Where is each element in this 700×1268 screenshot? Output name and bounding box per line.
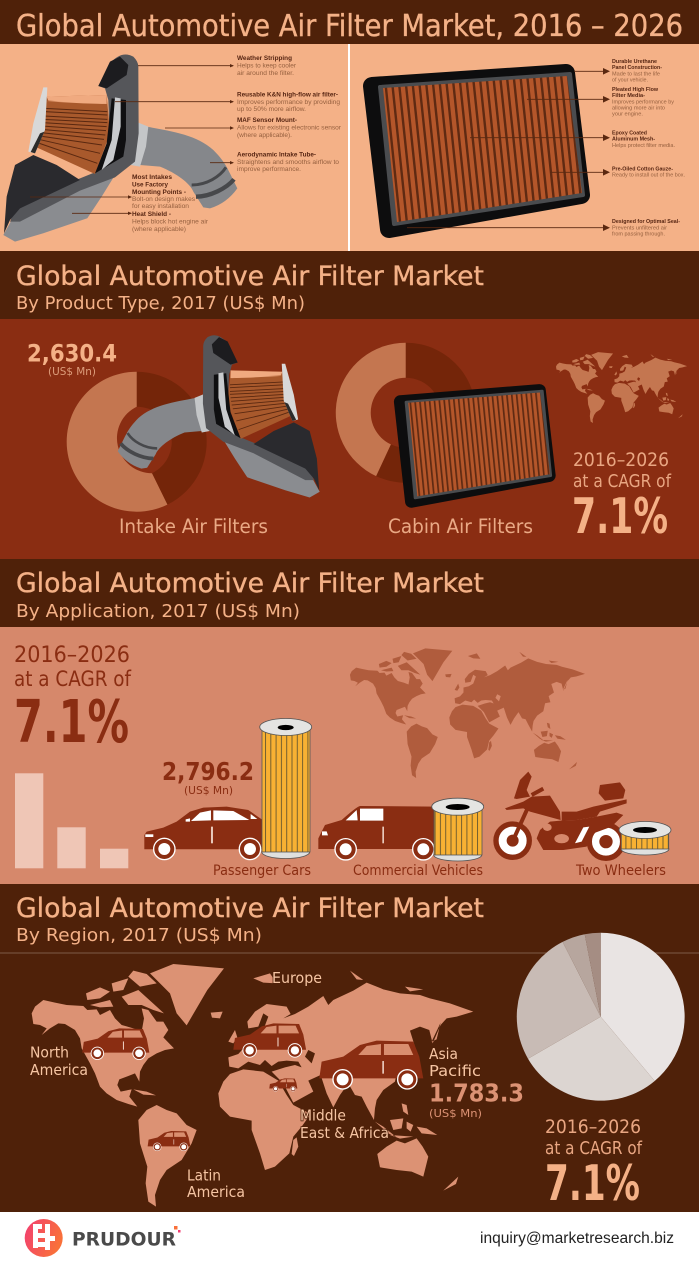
callout: optimal seal: Prevents unfiltered air	[612, 226, 667, 232]
callout: cotton gauze: Ready to install out of the box.	[612, 172, 685, 178]
CAGR callout	[14, 643, 132, 756]
callout: filter media: Improves performance by	[612, 100, 674, 106]
panel: region	[0, 933, 699, 1212]
CAGR callout: 2016–2026	[545, 1117, 641, 1138]
callout: filter media: Pleated High Flow	[612, 87, 659, 93]
callout: heat shield: (where applicable)	[132, 226, 186, 233]
icon: vehicle latin america	[148, 1131, 190, 1151]
logo wordmark: PRUDOUR	[72, 1230, 176, 1251]
callout: weather stripping: air around the filter.	[237, 70, 294, 77]
label: asia pacific: Pacific	[429, 1062, 481, 1080]
callout: heat shield: Heat Shield -	[132, 211, 171, 218]
label: north america: North	[30, 1044, 69, 1062]
callout: reusable filter: Reusable K&N high-flow air filter-	[237, 92, 338, 98]
icon: medium oil filter	[432, 798, 484, 861]
callout: urethane construction: Durable Urethane	[612, 59, 657, 65]
callout: cotton gauze: Pre-Oiled Cotton Gauze-	[612, 166, 673, 172]
icon: vehicle north america	[82, 1028, 149, 1060]
CAGR callout: 2016–2026	[573, 450, 669, 471]
callout: reusable filter: Improves performance by providing	[237, 99, 340, 106]
bar chart	[15, 773, 128, 868]
icon: vehicle asia pacific	[319, 1041, 423, 1089]
callout: optimal seal	[612, 219, 680, 238]
callout: aluminum mesh: Helps protect filter media.	[612, 143, 675, 149]
callout: MAF sensor	[237, 117, 342, 139]
heading: Global Automotive Air Filter Market	[16, 568, 484, 599]
value: passenger cars: 2,796.2	[162, 757, 254, 786]
panel: product type	[0, 319, 699, 559]
illustration: intake air filter	[3, 54, 237, 242]
callout: cotton gauze	[612, 166, 685, 178]
world map	[556, 352, 687, 423]
label: passenger cars: Passenger Cars	[213, 863, 311, 879]
label: asia pacific	[429, 1045, 481, 1080]
CAGR callout: 2016–2026	[14, 643, 130, 668]
title band	[0, 0, 699, 44]
label: middle east and africa: East & Africa	[300, 1124, 389, 1142]
callout: filter media	[612, 87, 674, 118]
heading: Global Automotive Air Filter Market	[16, 893, 484, 924]
subheading: By Product Type, 2017 (US$ Mn)	[16, 293, 305, 314]
callout: MAF sensor: MAF Sensor Mount-	[237, 117, 297, 124]
icon: small oil filter	[619, 822, 671, 855]
icon: tall oil filter	[260, 718, 312, 858]
callout: aluminum mesh: Aluminum Mesh-	[612, 136, 655, 142]
footer	[25, 1219, 674, 1257]
callout arrowheads	[128, 64, 234, 215]
icon: van	[318, 806, 436, 860]
label: latin america: Latin	[187, 1167, 221, 1185]
callout: optimal seal: from passing through.	[612, 232, 665, 238]
callout: urethane construction	[612, 59, 662, 84]
callout leader lines	[407, 71, 606, 228]
callout: urethane construction: Made to last the life	[612, 72, 660, 78]
callout: intake tube	[237, 152, 339, 173]
world map	[350, 648, 585, 778]
icon: vehicle europe	[233, 1023, 306, 1057]
icon: vehicle middle east	[269, 1078, 297, 1091]
callout: mounting points: Most Intakes	[132, 174, 172, 181]
panel: panel filter anatomy	[350, 44, 699, 251]
callout: MAF sensor: Allows for existing electronic sensor	[237, 124, 342, 132]
panel: intake filter anatomy	[0, 44, 348, 251]
label: latin america: America	[187, 1183, 245, 1201]
label: asia pacific: Asia	[429, 1045, 458, 1063]
logo dots	[174, 1226, 180, 1232]
label: cabin air filters: Cabin Air Filters	[388, 515, 533, 538]
callout: heat shield: Helps block hot engine air	[132, 218, 209, 226]
callout: mounting points	[132, 174, 195, 210]
CAGR callout: at a CAGR of	[14, 667, 132, 691]
callout: heat shield	[132, 211, 209, 233]
panel: application	[0, 627, 699, 884]
heading: Global Automotive Air Filter Market	[16, 261, 484, 292]
label: intake air filters: Intake Air Filters	[119, 515, 268, 538]
callout: mounting points: for easy installation	[132, 203, 189, 210]
illustration: cabin air filter	[399, 390, 552, 502]
band: application heading	[0, 559, 699, 627]
callout arrowheads	[603, 68, 610, 231]
donut chart: cabin air filters	[336, 343, 476, 483]
callout: weather stripping: Helps to keep cooler	[237, 62, 297, 70]
callout: mounting points: Bolt-on design makes	[132, 196, 195, 203]
CAGR callout	[572, 450, 672, 545]
callout: intake tube: improve performance.	[237, 166, 301, 173]
label: north america: America	[30, 1061, 88, 1079]
band: region heading	[0, 884, 699, 952]
callout: filter media: your engine.	[612, 112, 643, 118]
callout: weather stripping: Weather Stripping	[237, 55, 292, 62]
callout: filter media: allowing more air into	[612, 106, 665, 112]
label: two wheelers: Two Wheelers	[575, 863, 666, 879]
label: latin america	[187, 1167, 245, 1201]
callout: mounting points: Use Factory	[132, 182, 168, 188]
value: intake: 2,630.4	[27, 340, 117, 368]
CAGR callout: at a CAGR of	[545, 1138, 643, 1159]
callout: aluminum mesh: Epoxy Coated	[612, 130, 648, 136]
unit: intake: (US$ Mn)	[48, 366, 96, 378]
callout: intake tube: Aerodynamic Intake Tube-	[237, 152, 316, 158]
value: asia pacific: 1.783.3	[429, 1079, 524, 1108]
CAGR callout: 7.1%	[14, 687, 129, 756]
CAGR callout: 7.1%	[545, 1155, 640, 1212]
label: middle east and africa	[300, 1107, 389, 1142]
subheading: By Application, 2017 (US$ Mn)	[16, 601, 300, 622]
label: middle east and africa: Middle	[300, 1107, 346, 1125]
callout: intake tube: Straightens and smooths airflow to	[237, 159, 339, 166]
callout: urethane construction: of your vehicle.	[612, 78, 648, 84]
contact email: inquiry@marketresearch.biz	[480, 1230, 674, 1247]
callout leader lines	[30, 66, 233, 213]
logo mark	[25, 1219, 63, 1257]
callout: filter media: Filter Media-	[612, 93, 645, 99]
icon: passenger car	[144, 807, 265, 860]
callout: weather stripping	[237, 55, 297, 77]
CAGR callout: at a CAGR of	[573, 471, 672, 492]
pie chart	[517, 933, 685, 1101]
label: commercial vehicles: Commercial Vehicles	[353, 863, 483, 879]
icon: motorcycle	[496, 772, 627, 858]
illustration: panel air filter	[372, 73, 583, 229]
band: product type heading	[0, 251, 699, 319]
callout: reusable filter	[237, 92, 340, 113]
callout: optimal seal: Designed for Optimal Seal-	[612, 219, 680, 225]
label: europe: Europe	[272, 969, 322, 987]
world map with vehicles	[32, 964, 473, 1207]
donut chart: intake air filters	[67, 372, 207, 512]
callout: reusable filter: up to 50% more airflow.	[237, 106, 306, 113]
callout: mounting points: Mounting Points -	[132, 189, 186, 196]
illustration: intake air filter	[118, 335, 320, 498]
callout: MAF sensor: (where applicable).	[237, 132, 292, 139]
CAGR callout	[545, 1117, 643, 1212]
label: north america	[30, 1044, 88, 1079]
callout: aluminum mesh	[612, 130, 675, 149]
subheading: By Region, 2017 (US$ Mn)	[16, 925, 262, 946]
callout: urethane construction: Panel Construction-	[612, 65, 662, 71]
unit: passenger cars: (US$ Mn)	[184, 785, 233, 797]
unit: asia pacific: (US$ Mn)	[429, 1107, 482, 1120]
